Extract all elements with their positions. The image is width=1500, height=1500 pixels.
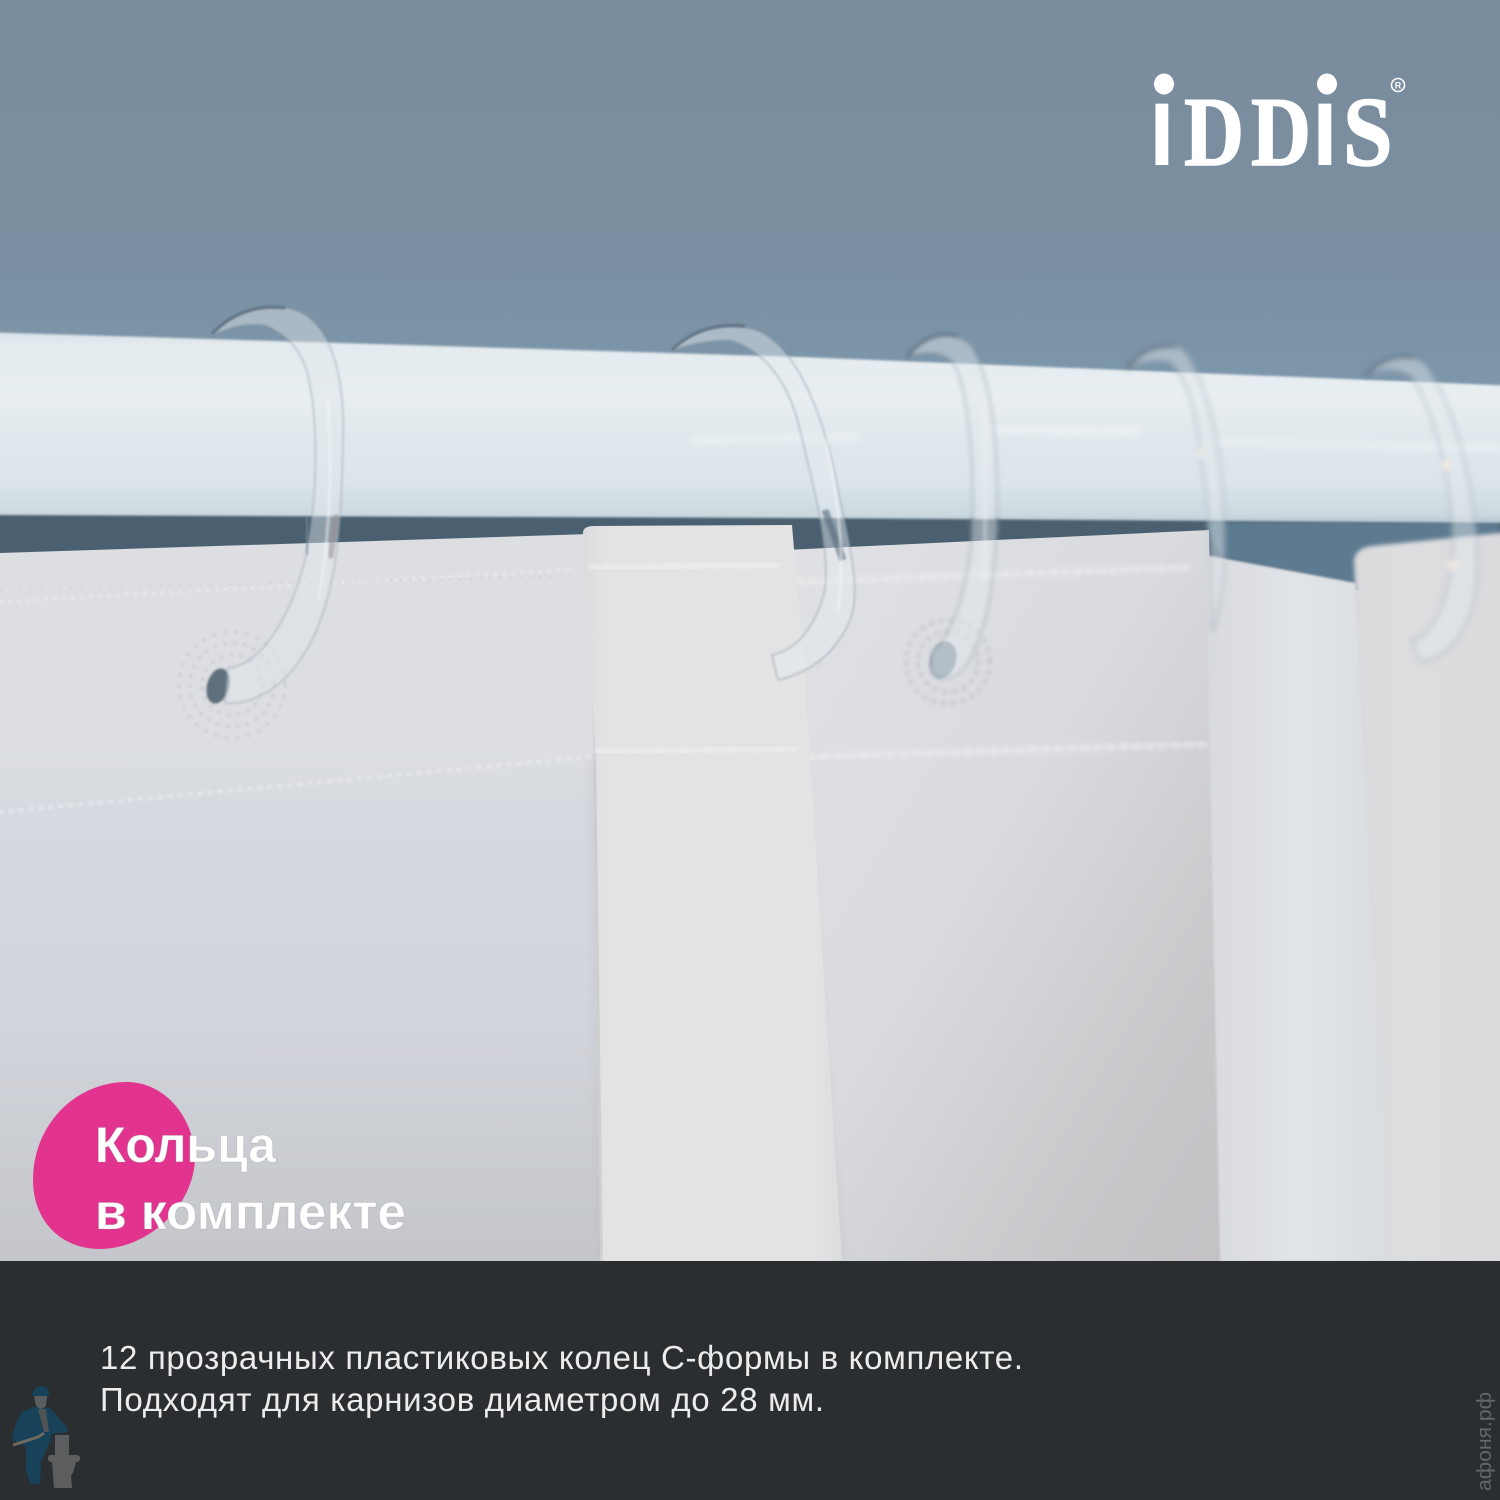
ring 3 [907, 335, 997, 679]
plumber body [12, 1407, 68, 1484]
grommet dots right [906, 620, 990, 704]
ring 1 [212, 307, 343, 703]
plumber shirt front [38, 1409, 49, 1432]
heading line 1: Кольца [95, 1117, 277, 1173]
rod highlight [690, 430, 1500, 448]
description line 2: Подходят для карнизов диаметром до 28 мм. [100, 1381, 824, 1418]
logo registered mark [1392, 78, 1404, 92]
grommet hole left [203, 666, 233, 706]
pink blob accent [33, 1082, 195, 1249]
curtain panel: rear sheet right of fold [785, 530, 1223, 1261]
logo letter I: I [1150, 84, 1174, 184]
grommet dots left [179, 632, 285, 738]
logo dot first i [1154, 74, 1174, 94]
curtain panel: front fold [583, 525, 842, 1261]
grommet hole right [926, 638, 960, 682]
wall visible behind curtain at right [1205, 522, 1500, 600]
watermark icon: plumber with toilet [12, 1386, 80, 1488]
curtain base layer [560, 590, 1500, 1261]
heading [95, 1117, 406, 1240]
description text [100, 1339, 1023, 1418]
plumber cap [32, 1386, 49, 1396]
rod [0, 332, 1500, 523]
bottom dark bar [0, 1261, 1500, 1500]
heading line 2: в комплекте [95, 1184, 406, 1240]
wrench [13, 1433, 44, 1445]
curtain panel: near right sheet [1354, 531, 1500, 1261]
shadow gap under rod [0, 510, 1500, 600]
logo: IDDIS [1150, 74, 1404, 187]
logo registered mark: R [1395, 80, 1402, 90]
logo letter I: I [1312, 84, 1337, 184]
logo letter S: S [1343, 78, 1393, 187]
curtain panel: far sheet [1206, 555, 1390, 1261]
description line 1: 12 прозрачных пластиковых колец С-формы в комплекте. [100, 1339, 1023, 1376]
logo letter D: D [1251, 77, 1311, 187]
logo dot second i [1317, 74, 1337, 94]
watermark text: афоня.рф [1474, 1392, 1496, 1491]
curtain panel: left sheet [0, 534, 600, 1261]
ring 4 [1127, 346, 1224, 632]
ring 2 [672, 325, 855, 680]
ring 5 [1365, 357, 1477, 662]
logo letter D: D [1184, 77, 1244, 187]
plumber face [34, 1396, 47, 1408]
toilet [48, 1435, 80, 1488]
wall background [0, 0, 1500, 560]
